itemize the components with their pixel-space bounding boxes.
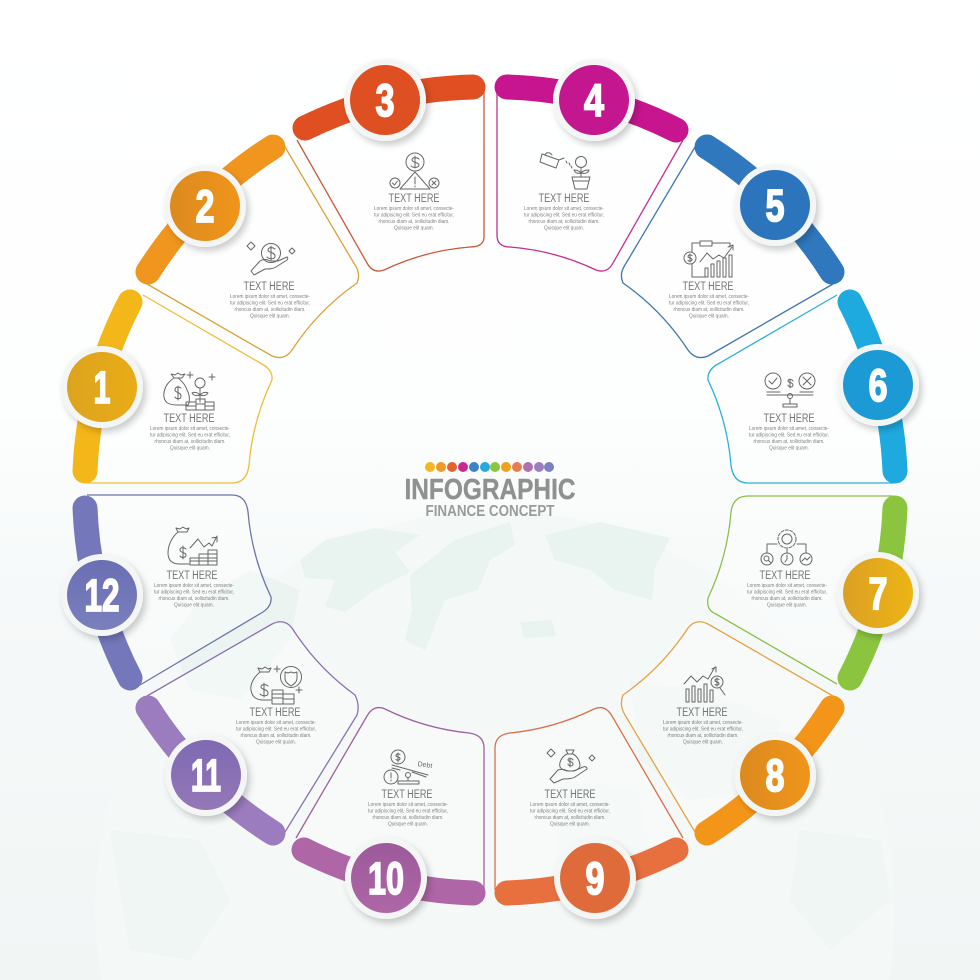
body text: rhoncus diam at, sollicitudin diam. — [158, 596, 230, 602]
body text: tur adipiscing elit. Sed eu erat efficitur, — [524, 212, 604, 218]
outline — [147, 622, 358, 832]
body text: Quisque elit quam. — [544, 226, 584, 232]
body text: Lorem ipsum dolor sit amet, consecte- — [230, 294, 310, 300]
body text: Lorem ipsum dolor sit amet, consecte- — [236, 720, 316, 726]
body text — [374, 206, 454, 232]
outline — [147, 147, 359, 358]
badge — [165, 734, 247, 816]
heading: TEXT HERE — [682, 281, 734, 293]
icon: hand holding money bag — [547, 749, 595, 783]
arc bar — [507, 87, 676, 130]
body text: Quisque elit quam. — [170, 446, 210, 452]
icon: money bag and plant — [164, 372, 215, 410]
arc bar — [148, 147, 273, 272]
badge: 4 — [584, 75, 604, 126]
arc bar — [85, 508, 130, 678]
badge — [837, 344, 919, 426]
body text: Lorem ipsum dolor sit amet, consecte- — [154, 583, 234, 589]
body text: Quisque elit quam. — [256, 740, 296, 746]
icon: risk triangle — [390, 153, 439, 189]
icon: watering can and plant — [540, 153, 590, 189]
outline — [87, 295, 272, 483]
body text: tur adipiscing elit. Sed eu erat efficitur, — [230, 300, 310, 306]
body text: rhoncus diam at, sollicitudin diam. — [752, 596, 822, 602]
body text — [524, 206, 604, 232]
body text: rhoncus diam at, sollicitudin diam. — [754, 439, 824, 445]
body text — [150, 426, 230, 452]
outline — [621, 622, 833, 832]
body text: Quisque elit quam. — [769, 446, 809, 452]
badge: 5 — [766, 180, 784, 231]
panel: step 8 — [621, 622, 833, 833]
arc bar — [707, 147, 832, 272]
badge — [164, 165, 246, 247]
body text — [236, 720, 316, 746]
badge: 6 — [868, 360, 888, 411]
body text: Lorem ipsum dolor sit amet, consecte- — [663, 720, 743, 726]
icon: money bag and shield — [251, 666, 302, 704]
heading: TEXT HERE — [538, 193, 590, 205]
badge: 11 — [191, 750, 221, 801]
world globe watermark — [95, 511, 895, 980]
body text — [669, 294, 749, 320]
icon: clipboard with chart — [684, 241, 733, 277]
body text: tur adipiscing elit. Sed eu erat efficitur, — [236, 726, 316, 732]
badge — [344, 59, 426, 141]
heading: TEXT HERE — [544, 789, 596, 801]
body text: rhoncus diam at, sollicitudin diam. — [668, 733, 738, 739]
body text: Lorem ipsum dolor sit amet, consecte- — [747, 583, 827, 589]
body text: tur adipiscing elit. Sed eu erat efficitur, — [150, 432, 230, 438]
badge — [345, 837, 427, 919]
outline — [621, 147, 833, 358]
badge: 12 — [84, 570, 120, 621]
body text: tur adipiscing elit. Sed eu erat efficitur, — [530, 808, 610, 814]
body text: Lorem ipsum dolor sit amet, consecte- — [374, 206, 454, 212]
outline — [297, 87, 484, 271]
badge: 7 — [868, 568, 888, 619]
body text — [230, 294, 310, 320]
heading: TEXT HERE — [764, 413, 815, 425]
arc bar — [707, 708, 832, 833]
panel: step 2 — [147, 147, 359, 358]
panel: step 11 — [147, 622, 358, 833]
arc bar — [850, 508, 895, 678]
title: INFOGRAPHIC — [404, 474, 576, 506]
arc bar — [850, 302, 895, 471]
body text: tur adipiscing elit. Sed eu erat efficitur, — [747, 590, 827, 596]
body text: Quisque elit quam. — [250, 314, 290, 320]
body text: Lorem ipsum dolor sit amet, consecte- — [530, 802, 610, 808]
body text: Quisque elit quam. — [767, 602, 807, 608]
body text: Lorem ipsum dolor sit amet, consecte- — [524, 206, 604, 212]
panel: step 5 — [621, 147, 833, 358]
body text: Lorem ipsum dolor sit amet, consecte- — [669, 294, 749, 300]
body text: Lorem ipsum dolor sit amet, consecte- — [749, 426, 829, 432]
badge: 3 — [376, 75, 394, 126]
heading: TEXT HERE — [166, 570, 218, 582]
panel: step 10 — [296, 708, 484, 919]
heading: TEXT HERE — [244, 281, 295, 293]
body text: Lorem ipsum dolor sit amet, consecte- — [150, 426, 230, 432]
body text: rhoncus diam at, sollicitudin diam. — [534, 815, 606, 821]
panel: step 3 — [297, 59, 484, 271]
icon: debt balance — [384, 750, 433, 784]
icon: gear with process — [761, 530, 812, 565]
panel: step 4 — [497, 59, 683, 271]
heading: TEXT HERE — [164, 413, 215, 425]
badge — [554, 837, 636, 919]
icon: hand holding coin — [247, 242, 295, 275]
heading: TEXT HERE — [250, 707, 301, 719]
icon: debt balance: Debt — [417, 761, 433, 770]
body text — [747, 583, 827, 608]
body text: rhoncus diam at, sollicitudin diam. — [234, 307, 306, 313]
panel: step 9 — [495, 708, 683, 919]
body text — [368, 802, 448, 828]
body text: rhoncus diam at, sollicitudin diam. — [154, 439, 226, 445]
badge — [61, 346, 143, 428]
arc bar — [304, 850, 473, 893]
panel: step 6 — [708, 295, 919, 483]
body text: Quisque elit quam. — [683, 740, 723, 746]
arc bar — [305, 87, 473, 128]
outline — [708, 295, 893, 483]
heading: TEXT HERE — [676, 707, 728, 719]
body text: Quisque elit quam. — [689, 314, 729, 320]
badge: 9 — [586, 853, 604, 904]
body text: rhoncus diam at, sollicitudin diam. — [528, 219, 600, 225]
outline — [87, 495, 271, 685]
icon: bar chart and magnifier — [684, 667, 725, 702]
body text: rhoncus diam at, sollicitudin diam. — [378, 219, 450, 225]
icon: balance scale — [765, 373, 815, 407]
body text: Quisque elit quam. — [174, 602, 214, 608]
title block — [404, 462, 576, 520]
arc bar — [507, 850, 676, 893]
body text — [154, 583, 234, 608]
badge — [734, 164, 816, 246]
body text: tur adipiscing elit. Sed eu erat efficitur, — [374, 212, 454, 218]
arc bar — [148, 708, 273, 833]
panel: step 12 — [61, 495, 271, 685]
body text: Quisque elit quam. — [394, 226, 434, 232]
heading: TEXT HERE — [388, 193, 440, 205]
body text: Quisque elit quam. — [388, 822, 428, 828]
body text: tur adipiscing elit. Sed eu erat efficitur, — [368, 808, 448, 814]
body text: tur adipiscing elit. Sed eu erat efficitur, — [749, 432, 829, 438]
body text — [749, 426, 829, 452]
outline — [296, 708, 484, 890]
body text — [663, 720, 743, 746]
badge: 2 — [196, 181, 214, 232]
heading: TEXT HERE — [382, 789, 433, 801]
colour dots — [425, 462, 554, 472]
badge: 8 — [766, 750, 784, 801]
body text: Lorem ipsum dolor sit amet, consecte- — [368, 802, 448, 808]
panel: step 7 — [708, 496, 919, 684]
panel: step 1 — [61, 295, 272, 483]
arc bar — [85, 302, 130, 471]
badge — [553, 59, 635, 141]
body text — [530, 802, 610, 828]
badge — [837, 552, 919, 634]
outline — [708, 496, 893, 684]
body text: tur adipiscing elit. Sed eu erat efficitur, — [669, 300, 749, 306]
outline — [495, 708, 683, 890]
body text: rhoncus diam at, sollicitudin diam. — [240, 733, 312, 739]
body text: tur adipiscing elit. Sed eu erat efficitur, — [154, 590, 234, 596]
body text: rhoncus diam at, sollicitudin diam. — [674, 307, 744, 313]
body text: rhoncus diam at, sollicitudin diam. — [372, 815, 444, 821]
outline — [497, 87, 683, 271]
subtitle: FINANCE CONCEPT — [426, 503, 555, 520]
heading: TEXT HERE — [760, 570, 811, 582]
icon: money bag with growth chart — [168, 527, 217, 565]
badge: 10 — [368, 853, 404, 904]
badge: 1 — [94, 362, 110, 413]
body text: Quisque elit quam. — [550, 822, 590, 828]
badge — [734, 734, 816, 816]
badge — [61, 554, 143, 636]
body text: tur adipiscing elit. Sed eu erat efficitur, — [663, 726, 743, 732]
